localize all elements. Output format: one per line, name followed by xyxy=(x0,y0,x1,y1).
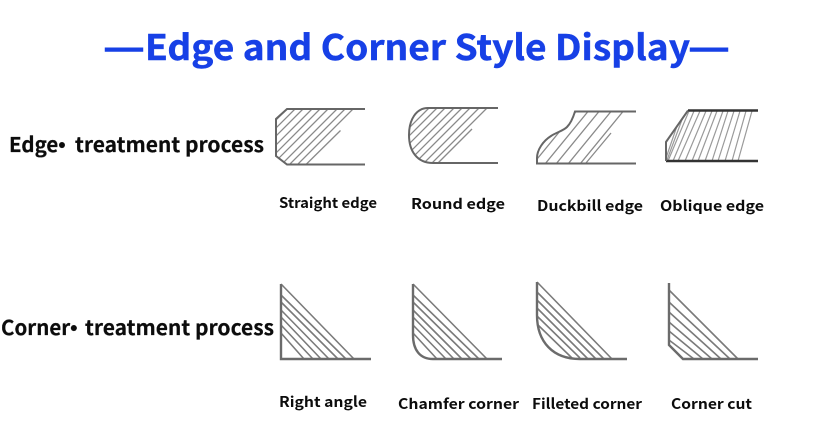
row heading: edge treatment: Edge• xyxy=(9,128,66,158)
label: corner cut: Corner cut xyxy=(671,393,752,414)
label: duckbill edge: Duckbill edge xyxy=(537,195,643,216)
title: Edge and Corner Style Display xyxy=(145,20,690,71)
diagram: corner cut xyxy=(669,283,758,359)
diagram: round edge xyxy=(408,107,498,164)
diagram: oblique edge xyxy=(666,110,758,161)
label: right angle: Right angle xyxy=(279,391,367,412)
row heading: corner treatment: Corner• xyxy=(1,311,77,341)
title: — xyxy=(105,27,143,69)
diagram: filleted corner xyxy=(537,282,627,359)
label: oblique edge: Oblique edge xyxy=(660,195,764,216)
title: — xyxy=(690,27,728,69)
diagram: chamfer corner xyxy=(413,284,502,359)
row heading: edge treatment: treatment process xyxy=(75,128,264,158)
row heading: corner treatment: treatment process xyxy=(85,311,274,341)
infographic canvas xyxy=(2,32,764,410)
label: straight edge: Straight edge xyxy=(279,192,377,213)
diagram: right angle xyxy=(281,284,371,359)
diagram: duckbill edge xyxy=(523,112,636,164)
diagram: straight edge xyxy=(275,108,365,166)
label: chamfer corner: Chamfer corner xyxy=(398,393,520,414)
label: round edge: Round edge xyxy=(411,193,505,214)
label: filleted corner: Filleted corner xyxy=(532,393,643,414)
